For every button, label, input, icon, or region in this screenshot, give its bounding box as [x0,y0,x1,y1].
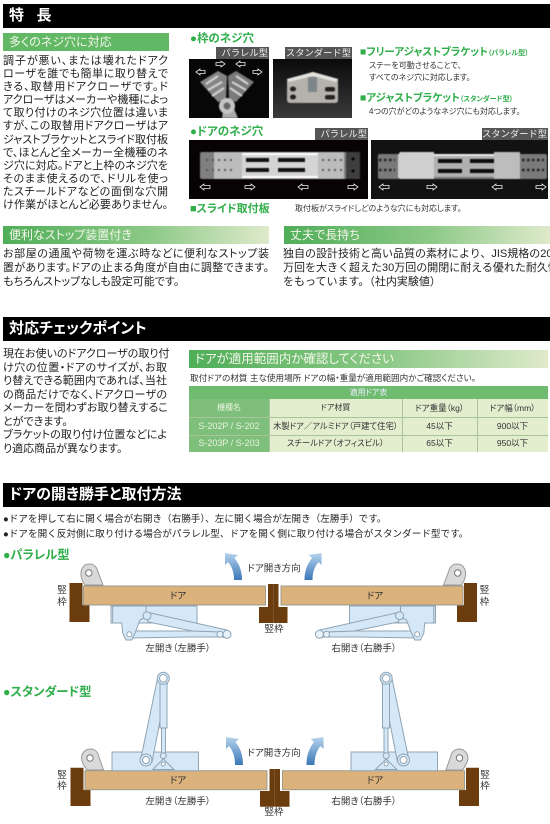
product heading: adjust bracket: ■アジャストブラケット（スタンダード型） [360,92,513,104]
heading: compatibility check points: 対応チェックポイント [9,320,147,337]
first column [189,399,269,452]
text block: stop device [3,248,269,288]
text block: check points: り適応商品が異なります。 [3,442,122,454]
text block: many screw holes: そのまま使えるので、ドリルを使っ [3,173,168,185]
door opening direction label: ドア開き方向 [247,747,301,759]
text block: many screw holes: ローザを誰でも簡単に取り替えで [3,68,168,80]
label: standard type door: スタンダード型 [482,129,547,139]
row 1 model: S-202P / S-202 [198,421,260,431]
hand labels: 右開き（右勝手） [331,796,397,808]
text block: many screw holes: ジャストブラケットとスライド取付板 [3,134,168,146]
hand labels [145,796,397,808]
label: parallel type: パラレル型 [222,48,268,58]
text block: check points: ブラケットの取り付け位置などによ [3,429,167,441]
heading: compatibility check points [3,317,550,341]
subheading: standard type: ●スタンダード型 [3,685,91,699]
product heading: slide plate: ■スライド取付板 [190,203,270,215]
frame labels: 枠 [480,596,490,608]
green heading: many screw holes [3,33,169,51]
door labels: ドア [170,591,186,602]
frame labels [57,585,490,635]
frame labels: 竪 [57,770,67,781]
label: parallel type door: パラレル型 [320,129,367,139]
row 2 weight: 65以下 [426,438,453,448]
column heading: width: ドア幅（mm） [490,403,535,413]
door opening direction label: ドア開き方向 [247,562,301,574]
row 2 material: スチールドア（オフィスビル） [287,438,384,448]
text block: many screw holes: 調子が悪い、または壊れたドアク [3,55,168,67]
left door assembly [70,553,273,640]
door labels: ドア [367,591,383,602]
label: standard type: スタンダード型 [286,48,351,58]
frame labels: 枠 [57,596,67,608]
text: free adjust bracket: ステーを可動させることで、 [369,61,462,70]
diagram: parallel type [57,553,490,654]
green heading: many screw holes: 多くのネジ穴に対応 [9,35,112,49]
frame labels: 竪 [480,770,490,781]
table title row: 適用ドア表 [350,388,387,397]
frame labels [57,770,490,818]
row 1 material: 木製ドア／アルミドア（戸建て住宅） [273,421,398,431]
text block: check points: とができます。 [3,416,68,428]
text block: durability: をもっています。（社内実験値） [283,276,441,288]
frame labels: 竪 [480,585,490,596]
hand labels: 左開き（左勝手） [145,796,211,808]
row 2 width: 950以下 [497,438,528,448]
heading: features [3,4,550,28]
row 1 width: 900以下 [497,421,528,431]
green heading: stop device: 便利なストップ装置付き [9,228,132,242]
column heading: material: ドア材質 [321,403,350,412]
heading: door swing and mounting [3,483,550,507]
text block: check points: メーカーを問わずお取り替えするこ [3,402,168,414]
text block: many screw holes: きる、取替用ドアクローザです。ド [3,81,168,93]
subheading: frame screw holes: ●枠のネジ穴 [190,33,254,45]
photo: parallel frame bracket [189,59,269,118]
text: slide plate: 取付板がスライドしどのような穴にも対応します。 [295,204,462,213]
hand labels: 左開き（左勝手） [145,642,211,654]
text block: many screw holes: たスチールドアなどの面倒な穴開 [3,186,168,198]
text: bullet notes [3,514,468,540]
text block: many screw holes: で、ほとんど全メーカー全機種のネ [3,147,168,159]
column heading: model: 機種名 [217,403,241,412]
frame labels: 竪枠 [264,806,284,818]
text block: many screw holes: ジ穴に対応。ドアと上枠のネジ穴を [3,160,168,172]
door labels [170,591,383,602]
frame labels: 枠 [480,780,490,792]
text: bullet notes: ●ドアを開く反対側に取り付ける場合がパラレル型、ドアを開く側に取り付ける場合がスタンダード型です。 [3,529,468,540]
door labels: ドア [367,776,383,786]
frame labels: 竪 [57,585,67,596]
hand labels: 右開き（右勝手） [331,642,397,654]
text: free adjust bracket: すべてのネジ穴に対応します。 [369,72,470,82]
text block: check points: り替えできる範囲内であれば、当社 [3,375,167,387]
text: bullet notes: ●ドアを押して右に開く場合が右開き（右勝手）、左に開く場合が左開き（左勝手）です。 [3,514,386,525]
green heading: stop device [3,226,269,244]
frame labels: 枠 [57,780,67,792]
text: adjust bracket: 4つの穴がどのようなネジ穴にも対応します。 [369,107,520,116]
text block: many screw holes: アクローザはメーカーや機種によっ [3,94,168,106]
caption: table intro: 取付ドアの材質 主な使用場所 ドアの幅・重量が適用範囲内かご確認ください。 [190,373,476,383]
diagram: standard type [57,672,490,818]
text block: check points: 現在お使いのドアクローザの取り付 [3,348,169,360]
subheading: parallel type: ●パラレル型 [3,548,70,562]
text block: many screw holes: すが、この取替用ドアクローザはア [3,120,168,132]
green heading: durability [284,226,550,244]
heading: door swing and mounting: ドアの開き勝手と取付方法 [9,486,181,503]
text block: stop device: お部屋の通風や荷物を運ぶ時などに便利なストップ装 [3,248,269,260]
green heading: check door range [189,350,548,368]
text block: check points [3,348,169,454]
product heading: free adjust bracket: ■フリーアジャストブラケット（パラレル型） [360,46,529,58]
hand labels [145,642,397,654]
frame labels: 竪枠 [264,623,284,635]
table: applicable doors [189,386,548,452]
table title row [189,386,548,399]
right door assembly [273,553,477,640]
text block: stop device: 置があります。ドアの止まる角度が自由に調整できます。 [3,262,269,274]
text block: many screw holes [3,54,168,211]
text block: many screw holes: け作業がほとんど必要ありません。 [3,199,168,211]
text block: durability [283,248,550,288]
text: free adjust bracket [369,61,470,82]
right door assembly [275,672,479,807]
row 1 weight: 45以下 [426,421,453,431]
row 2 model: S-203P / S-203 [198,438,260,448]
photo: standard slide plate [371,140,548,199]
photo: parallel slide plate [189,140,368,199]
text block: stop device: もちろんストップなしも設定可能です。 [3,276,179,288]
photo: standard frame bracket [273,59,352,118]
text block: durability: 独自の設計技術と高い品質の素材により、JIS規格の20 [283,248,550,260]
door labels [170,776,383,786]
green heading: durability: 丈夫で長持ち [290,228,360,242]
text block: check points: け穴の位置・ドアのサイズが、お取 [3,362,167,374]
subheading: door screw holes: ●ドアのネジ穴 [190,126,263,138]
green heading: check door range: ドアが適用範囲内か確認してください [195,352,394,366]
left door assembly [70,672,275,807]
text block: many screw holes: て取り付けのネジ穴位置は違いま [3,107,168,119]
column heading: weight: ドア重量（kg） [415,403,464,413]
text block: check points: の商品だけでなく、ドアクローザの [3,388,167,400]
door labels: ドア [170,776,186,786]
heading: features: 特 長 [9,7,52,24]
